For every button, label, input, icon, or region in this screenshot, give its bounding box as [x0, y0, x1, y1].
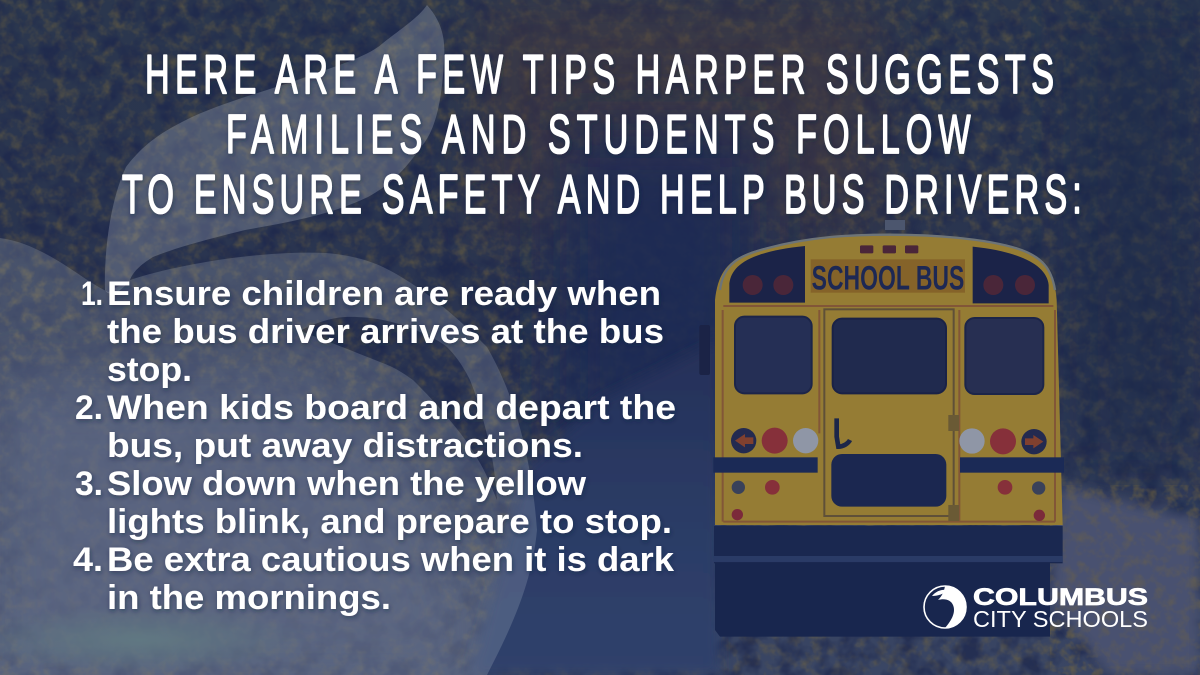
tip 1: Ensure children are ready when — [107, 275, 661, 313]
tip 3: 3. — [75, 465, 103, 503]
title — [122, 44, 1082, 225]
logo emblem — [924, 586, 966, 628]
upper left dark panel — [729, 246, 805, 303]
left window — [735, 317, 812, 393]
logo: Columbus City Schools: CITY SCHOOLS — [973, 606, 1148, 632]
bus body — [715, 234, 1063, 525]
door handle — [837, 418, 850, 447]
tip 1: the bus driver arrives at the bus — [107, 313, 664, 351]
logo: Columbus City Schools — [924, 584, 1148, 632]
tip 4: Be extra cautious when it is dark — [107, 541, 674, 579]
tip 2: 2. — [75, 389, 103, 427]
panel lines — [723, 306, 1055, 522]
rear door — [824, 309, 954, 516]
left mirror — [699, 325, 710, 375]
tip 3 — [75, 465, 672, 541]
school bus photo — [699, 220, 1064, 637]
road surface — [470, 340, 720, 675]
lower lights — [732, 480, 1045, 521]
right window — [965, 318, 1043, 394]
upper cap lights — [743, 245, 1035, 295]
tip 1 — [81, 275, 664, 389]
tip 2: When kids board and depart the — [107, 389, 676, 427]
school bus sign: SCHOOL BUS — [812, 259, 964, 297]
title: FAMILIES AND STUDENTS FOLLOW — [226, 104, 971, 165]
title: TO ENSURE SAFETY AND HELP BUS DRIVERS: — [122, 164, 1082, 225]
tip 1: 1. — [81, 275, 103, 313]
tip 4 — [73, 541, 674, 617]
tip 2: bus, put away distractions. — [107, 427, 583, 465]
school bus sign — [811, 259, 965, 297]
upper right dark panel — [973, 247, 1049, 303]
right rub rail — [960, 457, 1064, 473]
roof edge — [720, 235, 1055, 290]
logo: Columbus City Schools: COLUMBUS — [973, 584, 1148, 611]
tip 3: Slow down when the yellow — [107, 465, 587, 503]
door hinges — [948, 415, 959, 521]
tip 1: stop. — [107, 351, 192, 389]
watermark: flame swoosh logo — [0, 5, 537, 675]
tip 3: lights blink, and prepare to stop. — [107, 503, 672, 541]
door window — [833, 319, 946, 393]
title: HERE ARE A FEW TIPS HARPER SUGGESTS — [145, 44, 1054, 105]
tip 4: in the mornings. — [107, 579, 391, 617]
numbered tips list — [73, 275, 676, 617]
tip 4: 4. — [73, 541, 103, 579]
gravel verge — [1050, 485, 1200, 675]
lower door window — [831, 454, 946, 507]
bus underside — [715, 553, 1050, 637]
bus roof light — [885, 220, 905, 230]
tip 2 — [75, 389, 676, 465]
left light cluster — [731, 428, 818, 454]
bumper — [714, 526, 1063, 563]
right light cluster — [959, 428, 1047, 454]
left rub rail — [713, 457, 818, 473]
